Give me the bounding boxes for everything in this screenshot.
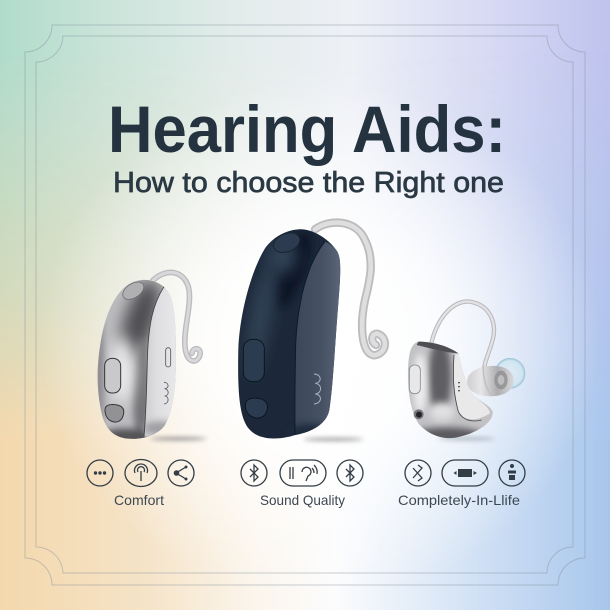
title: Hearing Aids: bbox=[108, 92, 506, 166]
icon: share bbox=[168, 460, 194, 486]
icon: crossed bluetooth bbox=[405, 460, 431, 486]
subtitle: How to choose the Right one bbox=[113, 167, 504, 199]
icon group: completely in life bbox=[405, 460, 525, 486]
hearing aid: silver left bbox=[90, 272, 207, 447]
icon group: comfort bbox=[87, 460, 194, 486]
hearing aid: completely in canal right bbox=[403, 302, 525, 445]
label: comfort: Comfort bbox=[114, 492, 164, 508]
icon: bluetooth bbox=[337, 460, 363, 486]
hearing aid: navy center bbox=[230, 223, 385, 447]
icon: bluetooth bbox=[241, 460, 267, 486]
icon: signal bbox=[125, 460, 157, 486]
icon: dots bbox=[87, 460, 113, 486]
icon group: sound quality bbox=[241, 460, 363, 486]
icon: vertical device bbox=[499, 460, 525, 486]
icon: sound pill bbox=[280, 460, 326, 486]
label: completely in life: Completely-In-Llife bbox=[398, 492, 520, 508]
icon: battery pill bbox=[442, 460, 488, 486]
label: sound quality: Sound Quality bbox=[260, 492, 345, 508]
